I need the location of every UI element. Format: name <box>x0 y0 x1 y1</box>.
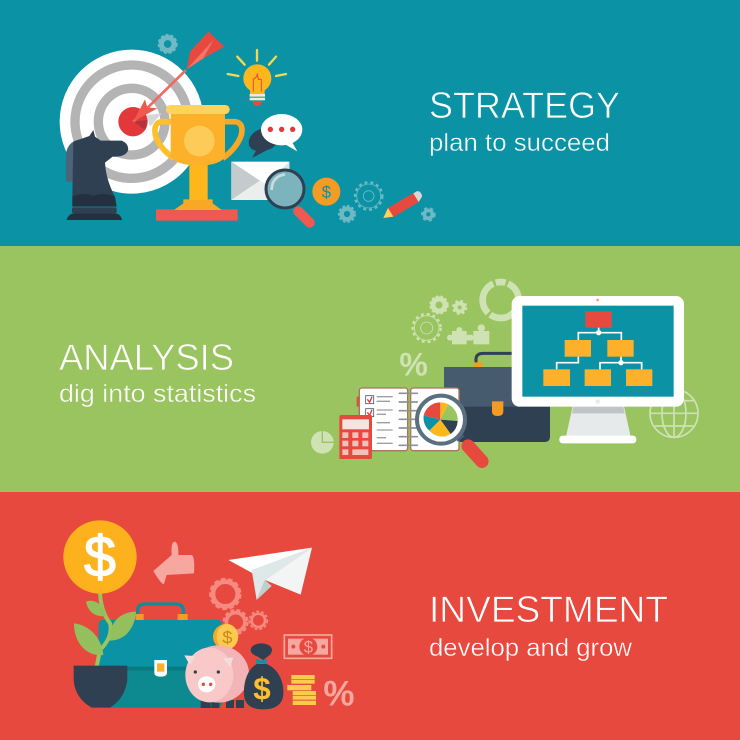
icon: money bag: $ <box>253 671 271 706</box>
panel: investment <box>0 492 740 740</box>
icon: pie chart <box>311 431 334 454</box>
icon: briefcase <box>444 353 550 442</box>
icon: money bag <box>244 643 283 709</box>
icon: percent sign: % <box>399 346 428 382</box>
org chart <box>543 311 652 386</box>
icon: arrow <box>133 32 224 122</box>
icon: puzzle pieces <box>447 324 489 344</box>
illustration: investment icons <box>63 520 354 714</box>
icon: piggy bank <box>184 624 249 708</box>
panel: analysis <box>0 246 740 492</box>
subheading: plan to succeed: plan to succeed <box>429 129 610 157</box>
icon: light bulb <box>228 50 286 106</box>
subheading: develop and grow: develop and grow <box>429 634 633 662</box>
icon: banknote <box>284 635 332 658</box>
heading: analysis: ANALYSIS <box>59 337 234 378</box>
icon: paper plane <box>228 548 312 600</box>
icon: dollar coin <box>312 178 340 206</box>
icon: knight chess piece <box>66 130 128 220</box>
icon: dollar coin: $ <box>322 183 331 202</box>
icon: small gear <box>422 208 435 221</box>
icon: monitor <box>512 296 684 443</box>
icon: plant with coin <box>63 520 137 708</box>
icon: target <box>60 50 204 194</box>
icon: piggy bank: $ <box>222 627 232 647</box>
subheading: dig into statistics: dig into statistics <box>59 380 256 408</box>
icon: gear top <box>159 35 177 53</box>
icon: donut chart <box>483 282 519 318</box>
icon: coin stack <box>287 675 316 705</box>
icon: percent sign: % <box>323 675 354 714</box>
icon: thumbs up <box>153 542 194 584</box>
icon: gear two <box>453 301 466 314</box>
icon: gear one <box>430 296 448 314</box>
icon: speech bubbles <box>249 114 302 158</box>
icon: outline gear <box>413 314 441 342</box>
icon: pencil <box>383 191 422 218</box>
icon: magnifier <box>266 170 317 230</box>
icon: outline gear <box>355 182 382 210</box>
heading: strategy: STRATEGY <box>429 85 620 126</box>
icon: banknote: $ <box>304 638 313 657</box>
illustration: analysis icons <box>311 282 698 471</box>
panel: strategy <box>0 0 740 246</box>
icon: solid gear <box>339 206 355 222</box>
heading: investment: INVESTMENT <box>429 589 668 630</box>
illustration: strategy icons <box>60 32 435 230</box>
icon: briefcase <box>99 604 222 708</box>
icon: magnifier with pie chart <box>417 396 491 471</box>
icon: gears <box>210 579 267 634</box>
icon: globe <box>650 389 698 437</box>
icon: calculator <box>339 415 372 459</box>
icon: envelope <box>231 162 289 200</box>
icon: plant with coin: $ <box>84 525 116 589</box>
icon: trophy <box>155 105 242 221</box>
icon: notebook <box>357 388 459 451</box>
